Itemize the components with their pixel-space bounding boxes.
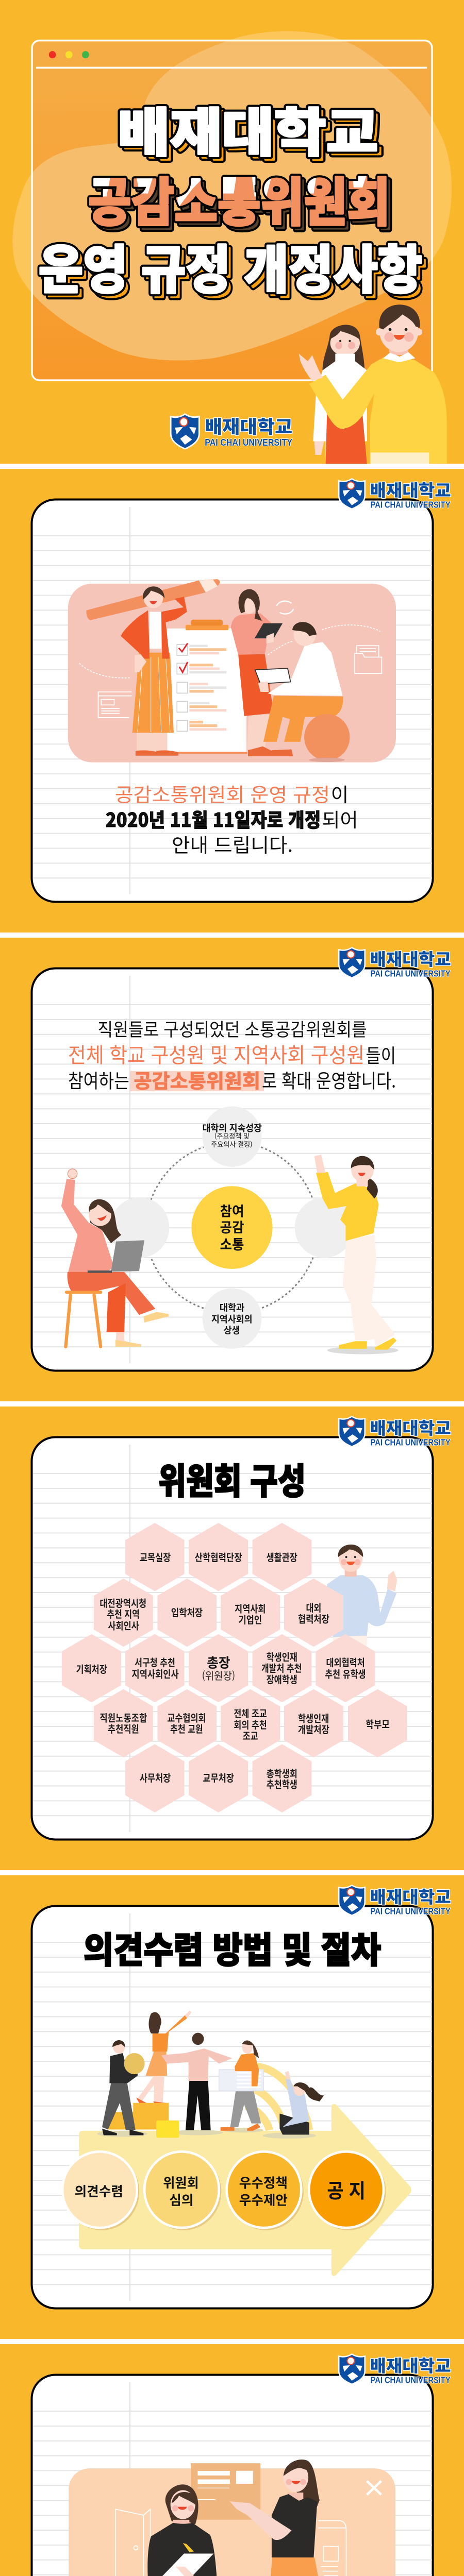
title: 공감소통위원회 xyxy=(88,160,390,236)
illustration: checklist team xyxy=(68,579,396,762)
hexagon grid: 협력처장 xyxy=(298,1611,329,1626)
illustration: woman xyxy=(313,325,367,464)
title: 운영 규정 개정사항 xyxy=(39,228,422,303)
title: 운영 규정 개정사항 xyxy=(42,232,426,307)
intro text: 로 확대 운영합니다. xyxy=(262,1065,396,1094)
hexagon grid: 대외협력처 xyxy=(326,1655,365,1669)
logo: PAI CHAI UNIVERSITY xyxy=(371,968,451,979)
illustration: two women xyxy=(115,2460,381,2576)
title: 운영 규정 개정사항 xyxy=(42,232,426,307)
hexagon grid: 개발처장 xyxy=(298,1722,329,1736)
logo: Pai Chai University (cover): 배재대학교 xyxy=(205,413,292,439)
logo xyxy=(339,478,451,510)
hexagon grid: 기업인 xyxy=(239,1612,262,1626)
logo: 배재대학교 xyxy=(370,478,451,501)
illustration: woman with laptop xyxy=(61,1169,169,1347)
hexagon grid: 사회인사 xyxy=(108,1618,139,1632)
notice text: 이 xyxy=(331,779,349,807)
logo: PAI CHAI UNIVERSITY xyxy=(371,1437,451,1448)
panel: committee xyxy=(31,1415,452,1840)
intro text: 직원들로 구성되었던 소통공감위원회를 xyxy=(97,1016,367,1042)
logo: 배재대학교 xyxy=(370,1884,451,1908)
panel: participation xyxy=(31,946,452,1371)
hexagon grid: 지역사회 xyxy=(235,1601,266,1616)
title: 운영 규정 개정사항 xyxy=(39,228,422,303)
panel: notice xyxy=(31,478,452,903)
title: 공감소통위원회 xyxy=(92,164,393,240)
notice text: 되어 xyxy=(322,805,358,833)
hexagon grid: 교무처장 xyxy=(203,1770,234,1785)
section divider 5 xyxy=(0,2339,464,2344)
hexagon grid: 산학협력단장 xyxy=(195,1550,242,1564)
section divider 3 xyxy=(0,1401,464,1406)
hexagon grid: 대외 xyxy=(306,1600,321,1615)
title: 배재대학교 xyxy=(118,91,378,166)
logo xyxy=(339,946,451,979)
hexagon grid: 기획처장 xyxy=(76,1662,107,1676)
hexagon grid: 서구청 추천 xyxy=(135,1655,175,1669)
notice text: 안내 드립니다. xyxy=(172,829,293,858)
section divider 2 xyxy=(0,933,464,938)
illustration: standing woman xyxy=(314,1155,399,1354)
heading: 의견수렴 방법 및 절차 xyxy=(84,1922,381,1973)
hexagon grid: 회의 추천 xyxy=(234,1717,267,1732)
hexagon grid: 학생인재 xyxy=(298,1710,329,1725)
process circles xyxy=(61,2150,386,2230)
hexagon grid: 개발처 추천 xyxy=(261,1660,302,1675)
logo: 배재대학교 xyxy=(370,1415,451,1439)
process circles: 심의 xyxy=(169,2190,193,2209)
hexagon grid: 교수협의회 xyxy=(167,1710,206,1724)
hexagon grid: 학부모 xyxy=(366,1717,390,1731)
intro text: 공감소통위원회 xyxy=(134,1065,260,1094)
hexagon grid: 대전광역시청 xyxy=(100,1596,146,1610)
hexagon grid: (위원장) xyxy=(202,1668,235,1683)
title: 배재대학교 xyxy=(118,91,378,166)
hexagon grid: 조교 xyxy=(243,1728,258,1743)
logo: 배재대학교 xyxy=(370,946,451,970)
hexagon grid: 생활관장 xyxy=(267,1550,297,1564)
hexagon grid: 총장 xyxy=(207,1652,230,1671)
heading: 위원회 구성 xyxy=(158,1453,306,1504)
hexagon grid: 지역사회인사 xyxy=(131,1666,179,1681)
hexagon grid: 사무처장 xyxy=(140,1770,171,1785)
logo xyxy=(339,2353,451,2385)
process circles: 위원회 xyxy=(163,2173,199,2192)
hexagon grid xyxy=(62,1523,407,1812)
notice text: 공감소통위원회 운영 규정 xyxy=(115,779,330,807)
process circles: 우수제안 xyxy=(239,2190,288,2209)
logo xyxy=(339,1884,451,1917)
peach panel xyxy=(69,2468,395,2576)
illustration: man xyxy=(299,304,447,464)
logo: 배재대학교 xyxy=(370,2353,451,2377)
logo: PAI CHAI UNIVERSITY xyxy=(371,2375,451,2385)
logo: PAI CHAI UNIVERSITY xyxy=(371,1906,451,1917)
cycle diagram xyxy=(110,1106,354,1349)
hexagon grid: 추천학생 xyxy=(267,1776,297,1791)
hexagon grid: 전체 조교 xyxy=(234,1706,267,1720)
cycle diagram: 참여 xyxy=(220,1200,244,1220)
logo: Pai Chai University (cover) xyxy=(171,413,293,449)
arrow background xyxy=(79,2104,411,2276)
cycle diagram: 소통 xyxy=(220,1233,244,1253)
logo: Pai Chai University (cover): PAI CHAI UNIVERSITY xyxy=(205,437,293,448)
cycle diagram: 공감 xyxy=(220,1216,244,1236)
section divider 4 xyxy=(0,1870,464,1875)
hexagon grid: 추천 지역 xyxy=(107,1606,140,1621)
background blob xyxy=(12,31,452,361)
intro text xyxy=(68,1016,396,1094)
title: 배재대학교 xyxy=(122,94,383,170)
panel: contact xyxy=(31,2353,452,2576)
process circles: 우수정책 xyxy=(239,2173,288,2192)
panel: procedure xyxy=(31,1884,452,2309)
intro text: 들이 xyxy=(366,1040,396,1068)
cycle diagram: 주요의사 결정) xyxy=(211,1139,253,1149)
title: 배재대학교 xyxy=(122,94,383,170)
process circles: 공 지 xyxy=(327,2176,366,2204)
section divider 1 xyxy=(0,464,464,469)
hexagon grid: 입학처장 xyxy=(171,1605,203,1619)
cycle diagram: 상생 xyxy=(224,1323,240,1337)
hexagon grid: 총학생회 xyxy=(267,1766,297,1780)
hexagon grid: 직원노동조합 xyxy=(100,1710,147,1724)
notebook card xyxy=(32,1906,433,2308)
title: 공감소통위원회 xyxy=(92,164,393,240)
intro text: 참여하는 xyxy=(68,1065,129,1094)
logo xyxy=(339,1415,451,1448)
cycle diagram: 대학의 지속성장 xyxy=(203,1121,262,1134)
illustration: man waving xyxy=(327,1545,397,1652)
logo: PAI CHAI UNIVERSITY xyxy=(371,499,451,510)
hexagon grid: 추천 유학생 xyxy=(325,1666,366,1681)
title xyxy=(39,91,426,307)
cycle diagram: 대학과 xyxy=(220,1300,245,1314)
title: 공감소통위원회 xyxy=(88,160,390,236)
notebook card xyxy=(32,2375,433,2576)
hexagon grid: 장애학생 xyxy=(267,1672,297,1686)
browser window frame xyxy=(31,39,433,381)
intro text: 전체 학교 구성원 및 지역사회 구성원 xyxy=(68,1038,364,1069)
hexagon grid: 학생인재 xyxy=(267,1649,297,1664)
notebook card xyxy=(32,500,433,902)
cycle diagram: (주요정책 및 xyxy=(214,1131,250,1141)
notice text xyxy=(106,779,358,858)
process circles: 의견수렴 xyxy=(75,2181,123,2200)
title: 공감소통위원회 xyxy=(88,160,390,236)
cycle diagram: 지역사회의 xyxy=(211,1312,253,1326)
notebook card xyxy=(32,1437,433,1839)
notice text: 2020년 11월 11일자로 개정 xyxy=(106,805,321,833)
hexagon grid: 추천 교원 xyxy=(170,1721,203,1736)
hexagon grid: 추천직원 xyxy=(108,1721,139,1736)
illustration: people xyxy=(97,2011,324,2139)
notebook card xyxy=(32,969,433,1370)
panel: cover xyxy=(12,31,452,464)
hexagon grid: 교목실장 xyxy=(140,1550,171,1564)
